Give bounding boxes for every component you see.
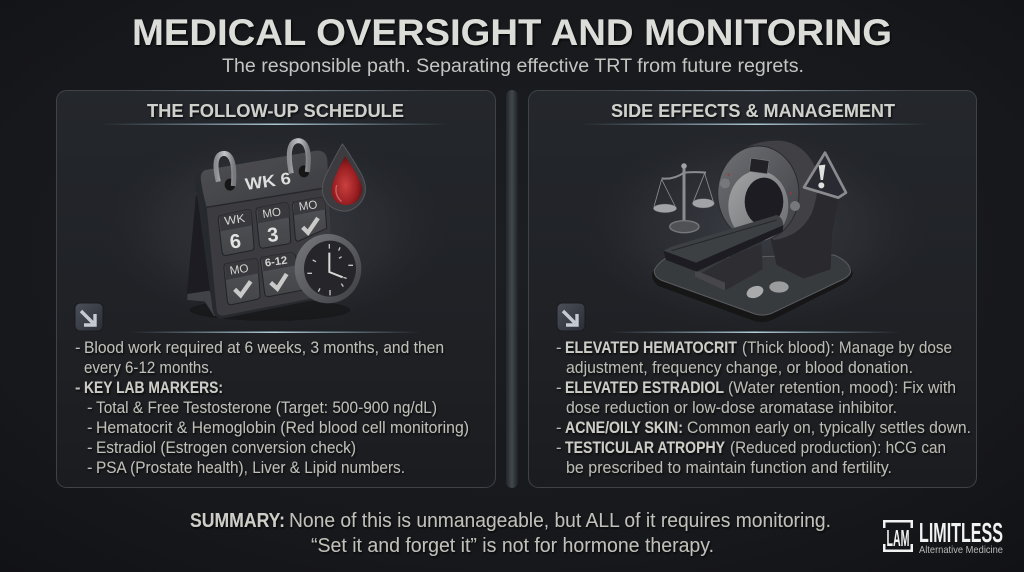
scanner pedestal bbox=[695, 243, 763, 291]
title: MEDICAL OVERSIGHT AND MONITORING bbox=[132, 12, 892, 53]
text block: side effects list: dose reduction or low-dose aromatase inhibitor. bbox=[566, 399, 897, 417]
text block: blood work and lab markers: - bbox=[87, 399, 92, 417]
summary: SUMMARY: bbox=[190, 510, 285, 532]
icon: scanner with scales, warning and pills bbox=[652, 141, 853, 322]
date tile: MO check bbox=[293, 197, 327, 241]
date tile: MO 3 bbox=[256, 203, 291, 248]
icon: warning triangle bbox=[804, 153, 846, 198]
icon: pills bbox=[745, 281, 789, 300]
icon: clock bbox=[295, 234, 361, 303]
date tile: MO check: MO bbox=[298, 198, 318, 214]
summary: None of this is unmanageable, but ALL of it requires monitoring. bbox=[289, 510, 831, 532]
logo: Limitless Alternative Medicine bbox=[883, 517, 1003, 556]
text block: side effects list: TESTICULAR ATROPHY bbox=[565, 439, 725, 457]
text block: side effects list: - bbox=[556, 379, 562, 397]
icon: blood drop bbox=[322, 144, 365, 211]
calendar body bbox=[195, 150, 333, 319]
subtitle: The responsible path. Separating effective TRT from future regrets. bbox=[222, 56, 804, 77]
text block: blood work and lab markers: Blood work required at 6 weeks, 3 months, and then bbox=[84, 339, 444, 357]
heading: the follow-up schedule: THE FOLLOW-UP SCHEDULE bbox=[147, 101, 404, 121]
scanner table bbox=[663, 215, 783, 263]
text block: side effects list: ELEVATED HEMATOCRIT bbox=[565, 339, 737, 357]
text block: blood work and lab markers: - bbox=[87, 419, 92, 437]
date tile: WK 6: WK bbox=[223, 212, 246, 228]
scanner legs and back of gantry bbox=[770, 190, 839, 279]
date tile: MO 3: MO bbox=[262, 205, 282, 221]
text block: side effects list: Common early on, typically settles down. bbox=[687, 419, 971, 437]
icon: arrow button right bbox=[557, 303, 585, 331]
panel: side effects and management bbox=[528, 90, 976, 488]
text block: blood work and lab markers: every 6-12 months. bbox=[84, 359, 213, 377]
text block: side effects list: - bbox=[556, 339, 562, 357]
date tile: WK 6: 6 bbox=[229, 230, 242, 254]
date tile: WK 6 bbox=[218, 209, 254, 255]
date tile: MO 3: 3 bbox=[266, 224, 280, 247]
image backdrop: scanner bbox=[580, 124, 930, 332]
logo: Limitless Alternative Medicine: Alternative Medicine bbox=[919, 544, 1003, 556]
text block: side effects list: ACNE/OILY SKIN: bbox=[565, 419, 683, 437]
summary bbox=[190, 510, 831, 557]
text block: blood work and lab markers: KEY LAB MARKERS: bbox=[84, 379, 223, 397]
scanner base bbox=[652, 257, 853, 322]
text block: side effects list bbox=[556, 339, 971, 477]
text block: side effects list: - bbox=[556, 439, 562, 457]
text block: side effects list: adjustment, frequency change, or blood donation. bbox=[566, 359, 913, 377]
calendar back stand bbox=[187, 195, 223, 317]
date tile: MO check lower: MO bbox=[229, 262, 250, 278]
text block: side effects list: - bbox=[556, 419, 562, 437]
icon: calendar with blood drop and clock bbox=[187, 141, 365, 321]
text block: side effects list: (Water retention, mood): Fix with bbox=[728, 379, 956, 397]
icon: scales bbox=[653, 163, 714, 233]
text block: blood work and lab markers: Estradiol (Estrogen conversion check) bbox=[96, 439, 356, 457]
icon: arrow button left bbox=[75, 303, 103, 331]
text block: side effects list: be prescribed to maintain function and fertility. bbox=[566, 459, 892, 477]
text block: blood work and lab markers: Total & Free Testosterone (Target: 500-900 ng/dL) bbox=[96, 399, 437, 417]
date tile: 6-12 check bbox=[261, 253, 303, 297]
logo mark: LAM bbox=[886, 525, 910, 551]
text block: blood work and lab markers: - bbox=[75, 379, 80, 397]
panel: follow-up schedule bbox=[56, 90, 496, 488]
calendar rings bbox=[225, 179, 235, 191]
summary: “Set it and forget it” is not for hormone therapy. bbox=[311, 535, 714, 557]
center divider bbox=[506, 90, 518, 488]
image backdrop: schedule bbox=[100, 124, 450, 332]
text block: side effects list: (Thick blood): Manage by dose bbox=[742, 339, 952, 357]
text block: blood work and lab markers: Hematocrit & Hemoglobin (Red blood cell monitoring) bbox=[96, 419, 469, 437]
text block: blood work and lab markers: PSA (Prostate health), Liver & Lipid numbers. bbox=[96, 459, 405, 477]
text block: blood work and lab markers: - bbox=[75, 339, 80, 357]
calendar header text: WK 6 bbox=[244, 169, 292, 194]
date tile: 6-12 check: 6-12 bbox=[264, 255, 288, 270]
scanner front ring bbox=[718, 146, 799, 241]
heading: side effects and management: SIDE EFFECTS & MANAGEMENT bbox=[611, 101, 895, 121]
date tile: MO check lower bbox=[224, 259, 260, 305]
text block: side effects list: (Reduced production): hCG can bbox=[730, 439, 946, 457]
text block: blood work and lab markers bbox=[75, 339, 469, 477]
text block: blood work and lab markers: - bbox=[87, 439, 92, 457]
text block: side effects list: ELEVATED ESTRADIOL bbox=[565, 379, 724, 397]
text block: blood work and lab markers: - bbox=[87, 459, 92, 477]
